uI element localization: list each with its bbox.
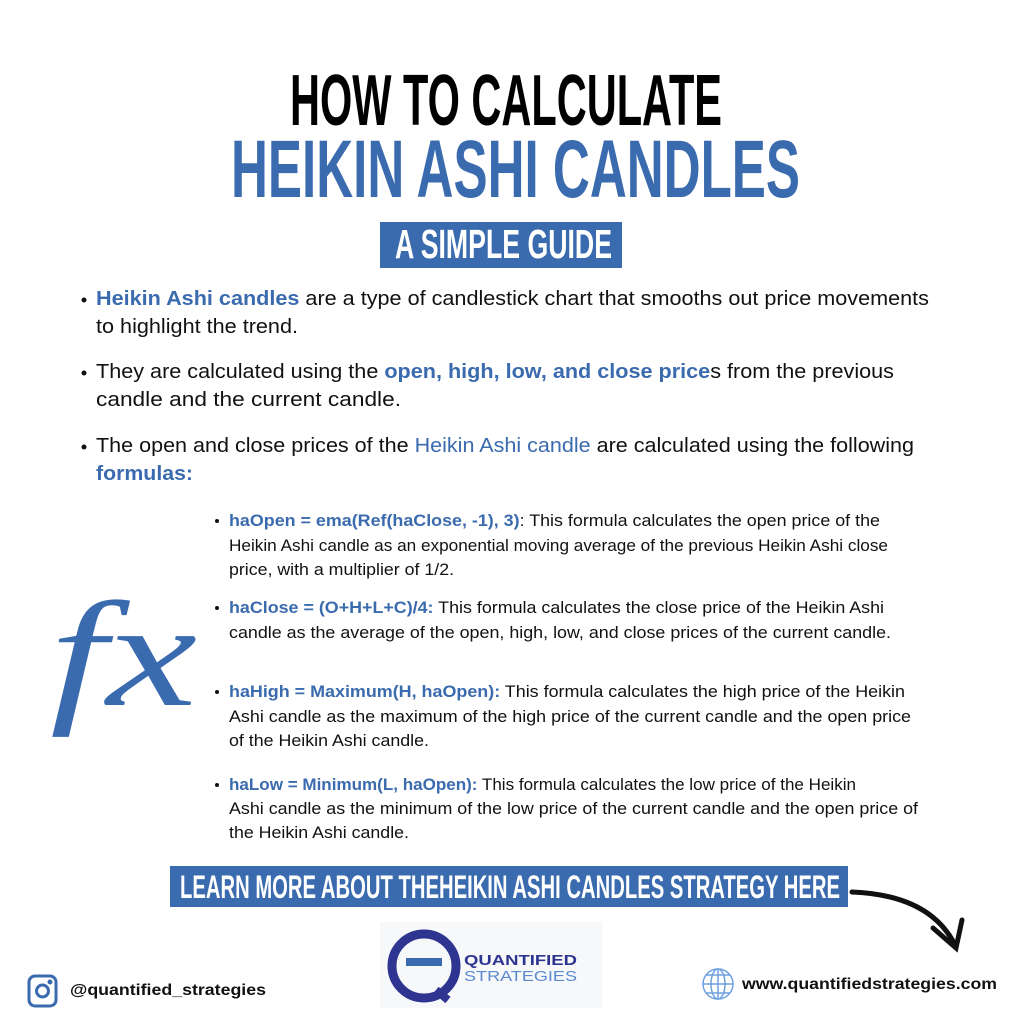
formula list: Heikin Ashi candle as an exponential moving average of the previous Heikin Ashi close (229, 536, 888, 555)
formula list: the Heikin Ashi candle. (229, 823, 409, 842)
formula list: Ashi candle as the minimum of the low price of the current candle and the open price of (229, 799, 918, 818)
subtitle box (380, 221, 622, 268)
title (231, 61, 800, 215)
website: www.quantifiedstrategies.com (741, 976, 997, 993)
formula list: haOpen = ema(Ref(haClose, -1), 3) : This formula calculates the open price of the (229, 511, 880, 530)
formula list: price, with a multiplier of 1/2. (229, 560, 454, 579)
formula list: of the Heikin Ashi candle. (229, 731, 429, 750)
icon: globe (703, 969, 733, 999)
formula list (215, 511, 918, 842)
formula list: haClose = (O+H+L+C)/4: This formula calculates the close price of the Heikin Ashi (229, 598, 884, 617)
icon: fx: fx (50, 572, 197, 738)
title: HOW TO CALCULATE (290, 61, 722, 141)
formula list: candle as the average of the open, high, low, and close prices of the current candle. (229, 623, 891, 642)
intro bullets: candle and the current candle. (96, 389, 401, 411)
icon: instagram (29, 976, 56, 1006)
intro bullets (82, 288, 929, 485)
arrow (852, 892, 962, 948)
subtitle box: A SIMPLE GUIDE (395, 221, 612, 267)
intro bullets: The open and close prices of the Heikin Ashi candle are calculated using the following (96, 435, 914, 457)
intro bullets: Heikin Ashi candles are a type of candlestick chart that smooths out price movements (96, 288, 929, 310)
instagram handle: @quantified_strategies (70, 982, 266, 999)
logo: STRATEGIES (464, 968, 577, 985)
formula list: haHigh = Maximum(H, haOpen): This formula calculates the high price of the Heikin (229, 682, 905, 701)
formula list: haLow = Minimum(L, haOpen): This formula calculates the low price of the Heikin (229, 775, 856, 794)
intro bullets: to highlight the trend. (96, 316, 298, 338)
intro bullets: formulas: (96, 463, 193, 485)
logo (380, 922, 602, 1008)
formula list: Ashi candle as the maximum of the high price of the current candle and the open price (229, 707, 911, 726)
intro bullets: They are calculated using the open, high, low, and close price s from the previous (96, 361, 894, 383)
logo: QUANTIFIED (464, 952, 577, 969)
